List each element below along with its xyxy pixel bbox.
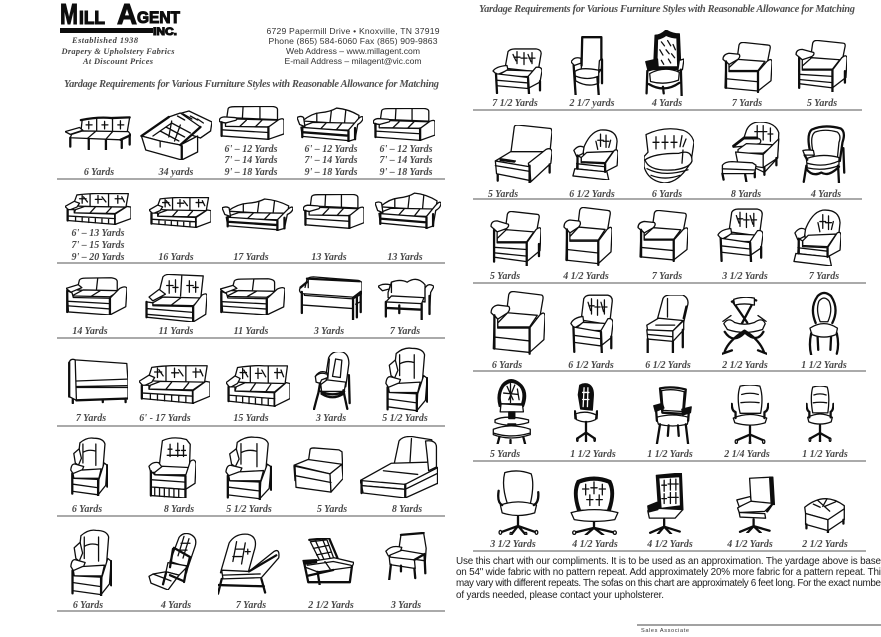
item: executive chair bbox=[489, 471, 538, 550]
item: sling chair bbox=[303, 538, 354, 611]
logo: Mill Agent Inc. bbox=[60, 0, 181, 38]
item: camelback sofa: 9' – 18 Yards bbox=[304, 167, 358, 178]
item: tufted loveseat: 11 Yards bbox=[159, 326, 193, 337]
item: round back chair with table: 5 Yards bbox=[490, 449, 520, 460]
item: tufted sofa: 15 Yards bbox=[233, 413, 269, 424]
row rules right bbox=[473, 110, 866, 551]
item: tufted fringed sofa: 16 Yards bbox=[158, 252, 194, 263]
item: armless chair bbox=[294, 448, 347, 515]
item: tufted sofa with three lengths: 9' – 20 Yards bbox=[71, 252, 125, 263]
logo: Mill Agent Inc.: GENT bbox=[137, 8, 181, 27]
item: tall back chair: 2 1/7 yards bbox=[568, 98, 615, 109]
item: tall tufted office chair: 4 1/2 Yards bbox=[646, 539, 693, 550]
item: wing chair with legs: 5 1/2 Yards bbox=[226, 504, 272, 515]
item: rolled arm sofa: 6' – 12 Yards bbox=[379, 144, 433, 155]
note paragraph: on 54" wide fabric with no pattern repeat. Add approximately 20% more fabric for a pattern repeat. Thi bbox=[456, 567, 881, 578]
item: skirted armchair bbox=[723, 42, 772, 109]
item: tufted executive chair bbox=[571, 477, 618, 550]
heading: right page: Yardage Requirements for Various Furniture Styles with Reasonable Allowance for Matching bbox=[479, 4, 855, 15]
item: loveseat: 14 Yards bbox=[72, 326, 108, 337]
item: camelback sofa: 7' – 14 Yards bbox=[304, 155, 358, 166]
tagline bbox=[60, 36, 174, 66]
item: swivel armchair bbox=[726, 477, 774, 550]
item: tufted sofa bbox=[226, 366, 290, 424]
item: open arm chair: 3 Yards bbox=[315, 413, 346, 424]
item: square armchair: 7 Yards bbox=[652, 271, 682, 282]
panel: sofas and chairs chart bbox=[57, 106, 445, 611]
item: high back side chair: 6 1/2 Yards bbox=[645, 360, 691, 371]
item: high back club chair bbox=[491, 292, 545, 371]
item: small office chair bbox=[802, 386, 848, 460]
item: tufted club chair bbox=[492, 49, 542, 109]
item: tufted sofa with three lengths: 6' – 13 Yards bbox=[71, 228, 125, 239]
item: tufted reclining chair bbox=[149, 533, 196, 611]
item: throne chair: 4 Yards bbox=[651, 98, 682, 109]
item: bench settee: 3 Yards bbox=[313, 326, 344, 337]
item: side chair: 3 Yards bbox=[390, 600, 421, 611]
panel: chairs chart bbox=[473, 30, 866, 551]
item: three cushion sofa bbox=[219, 106, 284, 178]
item: tufted executive chair: 4 1/2 Yards bbox=[571, 539, 618, 550]
item: lounge with tufting: 7 Yards bbox=[236, 600, 266, 611]
item: lounge with tufting bbox=[218, 534, 279, 611]
item: tufted skirted chair: 6 1/2 Yards bbox=[568, 360, 614, 371]
item: tufted sofa with three lengths: 7' – 15 Yards bbox=[71, 240, 125, 251]
item: swivel office chair: 2 1/4 Yards bbox=[723, 449, 770, 460]
item: tufted club chair: 7 Yards bbox=[809, 271, 839, 282]
item: sectional: 34 yards bbox=[158, 167, 193, 178]
item: skirted tufted chair bbox=[149, 438, 196, 515]
item: wing back chair bbox=[71, 530, 111, 611]
item: tufted sofa with three lengths bbox=[65, 193, 131, 263]
item: tufted barrel chair bbox=[718, 209, 768, 282]
item: tufted reclining chair: 4 Yards bbox=[160, 600, 191, 611]
item: ornate bergere bbox=[803, 126, 844, 200]
signature line: sales associate: Sales Associate bbox=[641, 628, 689, 634]
item: x-frame chair bbox=[721, 297, 768, 371]
contact details: Web Address – www.millagent.com bbox=[286, 46, 420, 56]
contact details: Phone (865) 584-6060 Fax (865) 909-9863 bbox=[268, 36, 438, 46]
logo: Mill Agent Inc.: ILL bbox=[79, 8, 105, 28]
item: small office chair: 1 1/2 Yards bbox=[802, 449, 848, 460]
item: tall back chair bbox=[568, 37, 615, 109]
item: dark frame armchair bbox=[490, 211, 541, 282]
item: two cushion sofa bbox=[303, 194, 364, 263]
item: armchair bbox=[796, 40, 847, 109]
item: tufted barrel chair: 3 1/2 Yards bbox=[721, 271, 768, 282]
item: camelback settee bbox=[378, 279, 434, 337]
item: tufted skirted chair bbox=[568, 295, 614, 371]
item: wing chair with legs bbox=[226, 437, 272, 515]
item: wood arm chair bbox=[647, 387, 693, 460]
tagline: Drapery & Upholstery Fabrics bbox=[60, 47, 174, 56]
item: camelback settee: 7 Yards bbox=[390, 326, 420, 337]
row rules left bbox=[57, 179, 445, 611]
item: armless chair: 5 Yards bbox=[317, 504, 347, 515]
item: tufted sofa six foot: 6' - 17 Yards bbox=[139, 413, 191, 424]
item: chaise: 8 Yards bbox=[392, 504, 422, 515]
item: swivel tub chair: 6 Yards bbox=[652, 189, 682, 200]
item: wood arm chair: 1 1/2 Yards bbox=[647, 449, 693, 460]
item: executive chair: 3 1/2 Yards bbox=[489, 539, 536, 550]
item: curved sofa bbox=[222, 199, 293, 263]
item: tufted tub chair bbox=[569, 130, 618, 200]
item: recliner: 5 Yards bbox=[488, 189, 518, 200]
item: skirted armchair: 7 Yards bbox=[732, 98, 762, 109]
note paragraph: Use this chart with our compliments. It is to be used as an approximation. The yardage above is base bbox=[456, 556, 881, 567]
item: tufted ottoman: 2 1/2 Yards bbox=[801, 539, 848, 550]
item: wing chair bbox=[382, 348, 428, 424]
heading: left page: Yardage Requirements for Various Furniture Styles with Reasonable Allowance for Matching bbox=[64, 79, 439, 90]
item: recliner bbox=[488, 125, 552, 200]
item: skirted loveseat: 11 Yards bbox=[234, 326, 268, 337]
tagline: Established 1938 bbox=[71, 36, 139, 45]
item: skirted tufted chair: 8 Yards bbox=[164, 504, 194, 515]
item: round back chair with table bbox=[490, 380, 530, 460]
item: task chair bbox=[570, 384, 616, 460]
item: square armchair bbox=[638, 210, 688, 282]
item: wing back chair: 6 Yards bbox=[73, 600, 103, 611]
item: wing chair bbox=[71, 438, 107, 515]
item: skirted loveseat bbox=[220, 279, 285, 337]
item: ornate bergere: 4 Yards bbox=[810, 189, 841, 200]
item: tall tufted office chair bbox=[646, 473, 693, 550]
item: side chair bbox=[386, 533, 426, 611]
item: throne chair bbox=[646, 30, 684, 109]
item: wing chair: 5 1/2 Yards bbox=[382, 413, 428, 424]
item: dining chair: 1 1/2 Yards bbox=[801, 360, 847, 371]
logo: Mill Agent Inc.: INC. bbox=[153, 26, 177, 38]
item: loveseat bbox=[66, 278, 127, 337]
item: tufted club chair: 7 1/2 Yards bbox=[492, 98, 538, 109]
item: corner sofa bbox=[69, 359, 128, 424]
item: tufted loveseat bbox=[147, 274, 207, 337]
item: swivel armchair: 4 1/2 Yards bbox=[726, 539, 773, 550]
item: wood frame sofa: 6 Yards bbox=[84, 167, 114, 178]
note paragraph bbox=[456, 556, 881, 601]
item: wood frame sofa bbox=[65, 117, 131, 178]
item: tufted club chair bbox=[794, 210, 841, 282]
tagline: At Discount Prices bbox=[82, 57, 153, 66]
item: tufted sofa six foot bbox=[139, 366, 210, 424]
item: curved sofa: 17 Yards bbox=[233, 252, 269, 263]
item: high back club chair: 6 Yards bbox=[492, 360, 522, 371]
item: sectional bbox=[141, 111, 212, 178]
note paragraph: may vary with different repeats. The sofas on this chart are approximately 6 feet long. For the exact numbe bbox=[456, 578, 881, 589]
item: bench settee bbox=[300, 277, 362, 337]
item: high back side chair bbox=[645, 295, 691, 371]
item: swivel tub chair bbox=[644, 129, 694, 200]
item: open arm chair bbox=[314, 351, 350, 424]
item: camelback sofa bbox=[297, 108, 363, 178]
item: dining chair bbox=[801, 293, 847, 371]
item: two cushion sofa: 13 Yards bbox=[311, 252, 347, 263]
contact details: 6729 Papermill Drive • Knoxville, TN 37919 bbox=[266, 26, 440, 36]
item: rolled arm sofa: 7' – 14 Yards bbox=[379, 155, 433, 166]
item: tall armchair bbox=[562, 208, 612, 282]
note paragraph: of yards needed, please contact your upholsterer. bbox=[456, 590, 664, 601]
item: sling chair: 2 1/2 Yards bbox=[307, 600, 354, 611]
item: rolled arm sofa bbox=[373, 108, 435, 178]
item: chair with ottoman: 8 Yards bbox=[731, 189, 761, 200]
item: rolled arm sofa: 9' – 18 Yards bbox=[379, 167, 433, 178]
item: tufted ottoman bbox=[801, 499, 848, 550]
item: corner sofa: 7 Yards bbox=[76, 413, 106, 424]
item: dark frame armchair: 5 Yards bbox=[490, 271, 520, 282]
item: three cushion sofa: 6' – 12 Yards bbox=[224, 144, 278, 155]
item: tufted fringed sofa bbox=[149, 197, 211, 263]
item: chaise bbox=[360, 437, 438, 515]
item: chippendale sofa bbox=[375, 193, 441, 263]
item: task chair: 1 1/2 Yards bbox=[570, 449, 616, 460]
item: camelback sofa: 6' – 12 Yards bbox=[304, 144, 358, 155]
contact details: E-mail Address – milagent@vic.com bbox=[284, 56, 422, 66]
item: x-frame chair: 2 1/2 Yards bbox=[721, 360, 768, 371]
item: three cushion sofa: 7' – 14 Yards bbox=[224, 155, 278, 166]
contact details bbox=[266, 26, 440, 66]
item: tall armchair: 4 1/2 Yards bbox=[562, 271, 609, 282]
item: chair with ottoman bbox=[722, 122, 779, 200]
item: chippendale sofa: 13 Yards bbox=[387, 252, 423, 263]
item: three cushion sofa: 9' – 18 Yards bbox=[224, 167, 278, 178]
item: wing chair: 6 Yards bbox=[72, 504, 102, 515]
item: armchair: 5 Yards bbox=[807, 98, 837, 109]
item: tufted tub chair: 6 1/2 Yards bbox=[569, 189, 615, 200]
item: swivel office chair bbox=[723, 385, 770, 460]
